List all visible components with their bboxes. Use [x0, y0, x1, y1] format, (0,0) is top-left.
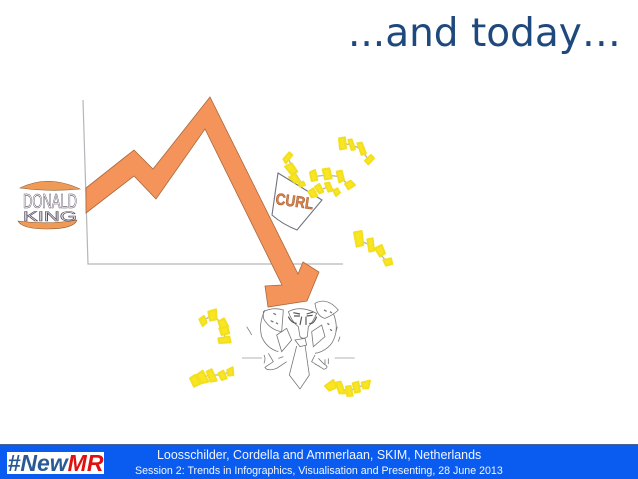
connectors — [193, 315, 366, 392]
chart axes — [83, 100, 343, 264]
logo: Donald King burger — [18, 181, 80, 229]
icon: stressed man — [242, 301, 355, 389]
footer authors: Loosschilder, Cordella and Ammerlaan, SKIM, Netherlands — [157, 448, 481, 462]
connectors — [288, 143, 387, 262]
logo: Donald King burger: DONALD — [23, 191, 77, 213]
footer bar — [0, 444, 638, 479]
orange falling arrow — [86, 97, 319, 307]
strips — [283, 137, 392, 266]
icon: cup: CURL — [274, 191, 315, 213]
logo: Donald King burger: KING — [23, 208, 77, 224]
yellow money strips around the man — [190, 309, 370, 396]
footer session: Session 2: Trends in Infographics, Visualisation and Presenting, 28 June 2013 — [135, 465, 503, 477]
yellow money strips near cup, top right and right — [283, 137, 392, 266]
title: ...and today… — [348, 11, 621, 56]
strips — [190, 309, 370, 396]
icon: cup — [272, 173, 322, 230]
